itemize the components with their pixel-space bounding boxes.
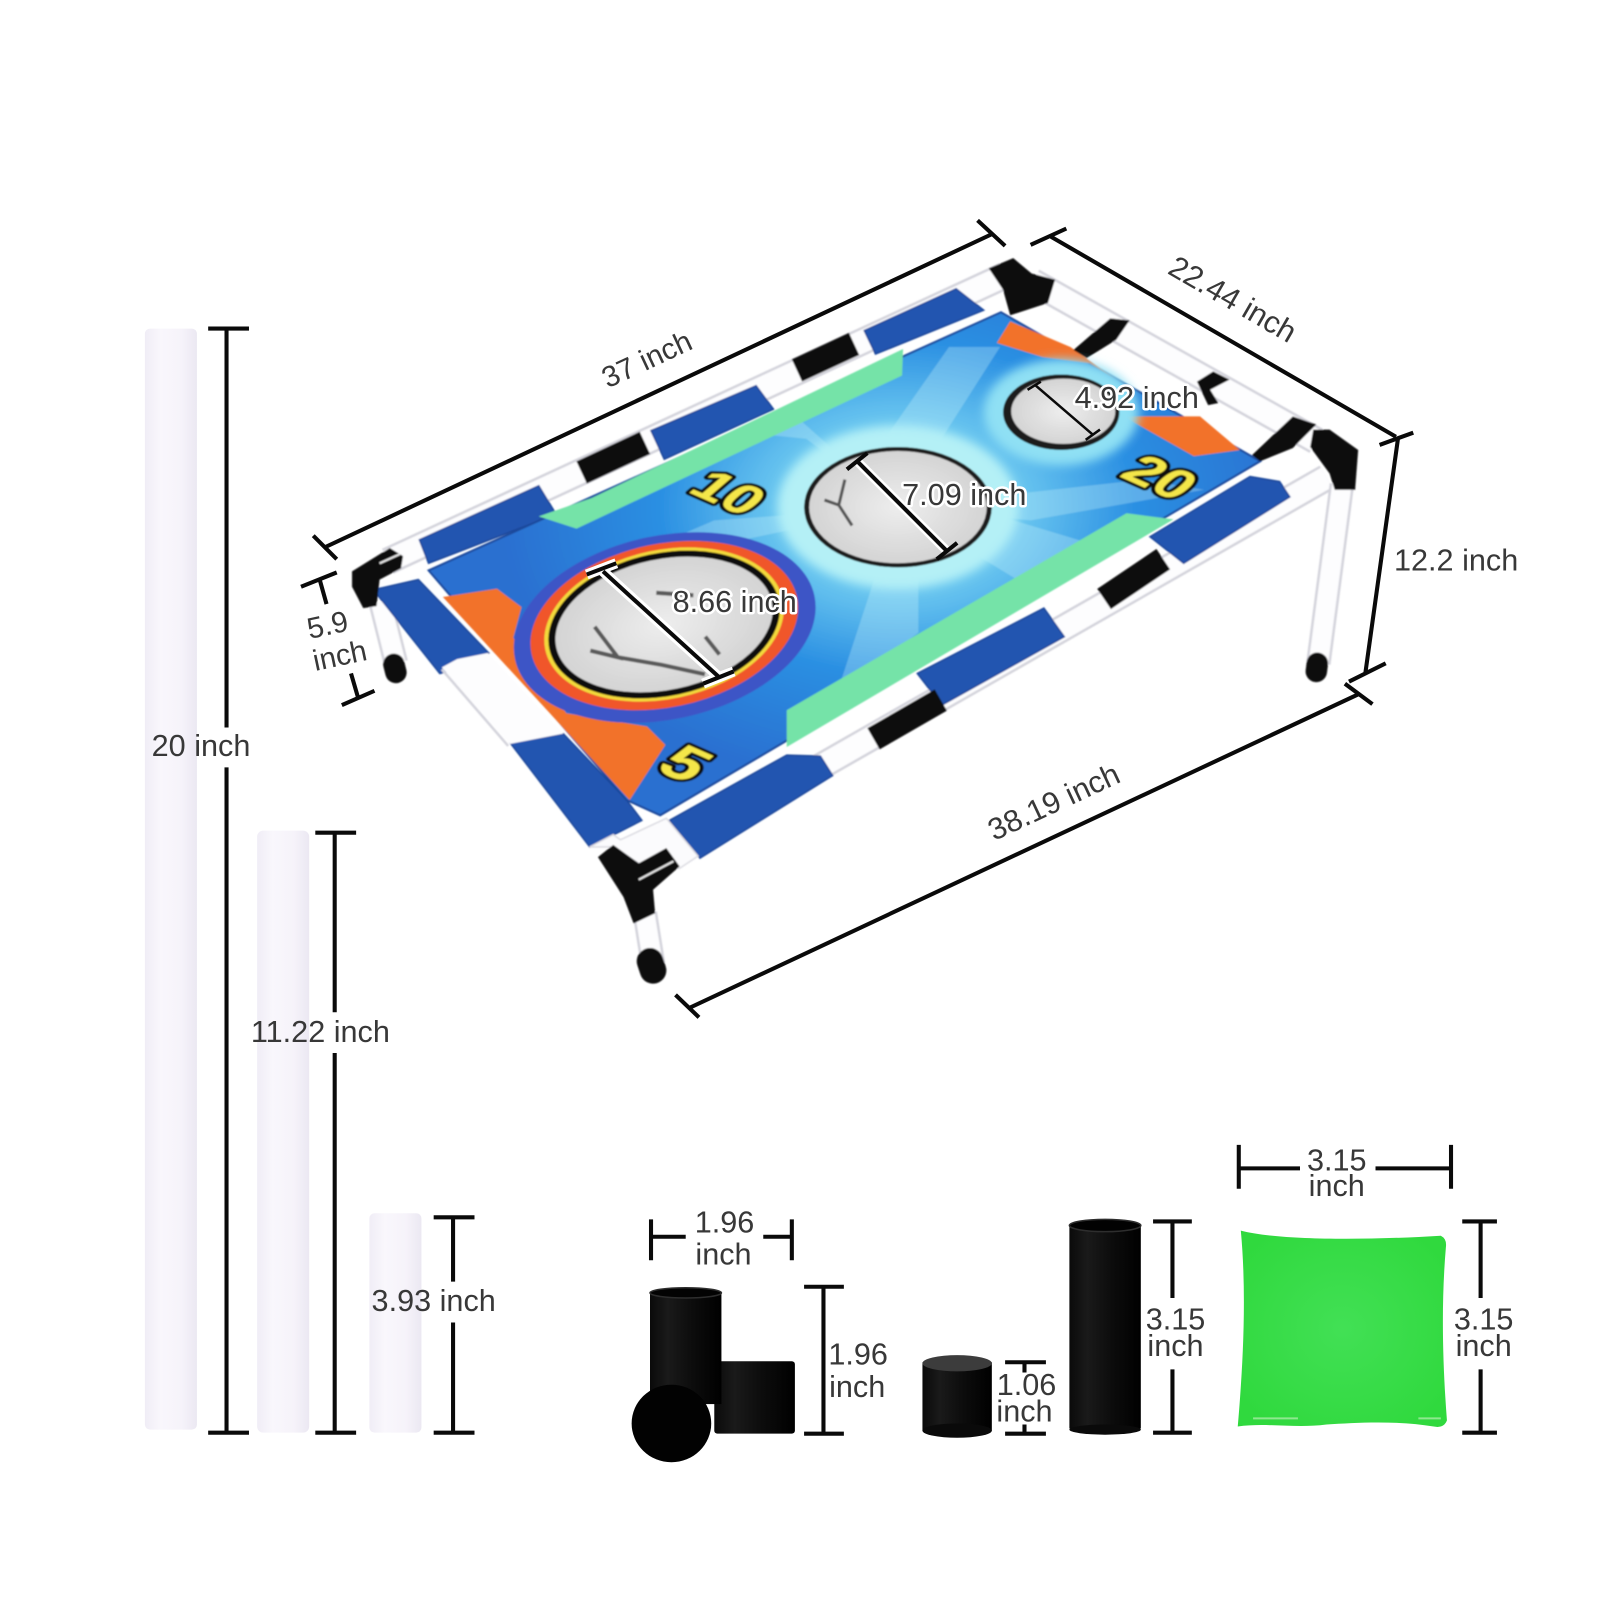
black short cylinder: [922, 1355, 992, 1438]
mat surface: [429, 312, 1260, 815]
green bean bag: [1238, 1231, 1447, 1427]
score number 20: 20: [1109, 447, 1210, 509]
dimension: hole 4.92 inch: [1028, 381, 1199, 440]
dimension: hole 7.09 inch: 7.09 inch: [902, 478, 1026, 512]
black elbow connector: [632, 1288, 795, 1462]
dimension: hole 8.66 inch: [587, 563, 797, 684]
black sleeves: [582, 344, 1163, 739]
dimension: bag height 3.15 inch: inch: [1456, 1329, 1512, 1363]
dimension: elbow height 1.96 inch: inch: [829, 1370, 885, 1404]
highlight lines on connectors: [380, 554, 673, 880]
dimension: hole 7.09 inch: [847, 453, 1026, 559]
dimension: 12.2 inch: [1349, 433, 1518, 682]
score number 10: 10: [678, 462, 779, 524]
black corner connectors: [352, 258, 1358, 923]
black straps: [1073, 318, 1316, 461]
dimension: 11.22 inch: [251, 833, 390, 1433]
dimension: 1.06 inch: inch: [996, 1394, 1053, 1428]
frame tubes: [388, 276, 1327, 862]
hole: 5 points large: [496, 506, 834, 749]
medium white pole 11.22 inch: [257, 831, 309, 1433]
blue fabric flaps: [373, 289, 1290, 858]
dimension: 38.19 inch: [676, 684, 1372, 1017]
hole: 10 points medium: [778, 426, 1018, 589]
dimension: 11.22 inch: 11.22 inch: [251, 1015, 390, 1049]
score number 5: 5: [644, 736, 726, 792]
dimension: 37 inch: 37 inch: [597, 325, 697, 395]
dimension: 5.9 inch height: 5.9: [304, 605, 351, 646]
dimension: 22.44 inch: [1031, 229, 1396, 437]
game frame with target mat: [352, 258, 1358, 970]
dimension: 38.19 inch: 38.19 inch: [983, 757, 1125, 847]
black tall cylinder: [1069, 1219, 1141, 1435]
dimension: 3.93 inch: [372, 1217, 496, 1433]
hole: 20 points small: [984, 359, 1139, 465]
dimension: tall cylinder 3.15 inch: [1146, 1221, 1205, 1433]
dimension: 1.06 inch: [996, 1362, 1056, 1434]
lower left tube: [442, 653, 698, 868]
dimension: bag width 3.15 inch: [1239, 1143, 1451, 1203]
dimension: 37 inch: [313, 220, 1005, 559]
dimension: 5.9 inch height: inch: [310, 634, 370, 678]
green strips: [539, 349, 1173, 747]
dimension: bag width 3.15 inch: inch: [1309, 1169, 1365, 1203]
dimension: 1.06 inch: 1.06: [997, 1368, 1056, 1402]
dimension: elbow height 1.96 inch: [804, 1287, 888, 1434]
dimension: 5.9 inch height: [301, 572, 374, 705]
dimension: 20 inch: [152, 329, 250, 1433]
dimension: hole 4.92 inch: 4.92 inch: [1075, 381, 1199, 415]
dimension: tall cylinder 3.15 inch: 3.15: [1146, 1303, 1205, 1337]
mat light rays: [687, 346, 1204, 678]
dimension: tall cylinder 3.15 inch: inch: [1147, 1329, 1204, 1363]
dimension: bag height 3.15 inch: [1454, 1221, 1513, 1433]
dimension: 20 inch: 20 inch: [152, 729, 250, 763]
dimension: 12.2 inch: 12.2 inch: [1394, 543, 1518, 577]
black feet: [394, 663, 1317, 970]
dimension: bag height 3.15 inch: 3.15: [1454, 1303, 1513, 1337]
dimension: hole 8.66 inch: 8.66 inch: [673, 585, 797, 619]
frame legs: [381, 485, 1342, 964]
dimension: elbow width 1.96 inch: [651, 1206, 792, 1271]
dimension: elbow width 1.96 inch: 1.96: [695, 1206, 754, 1240]
orange corners: [443, 321, 1240, 800]
dimension: bag width 3.15 inch: 3.15: [1307, 1143, 1367, 1177]
short white pole 3.93 inch: [369, 1213, 421, 1433]
dimension: 3.93 inch: 3.93 inch: [372, 1284, 496, 1318]
long white pole 20 inch: [145, 329, 197, 1430]
dimension: elbow width 1.96 inch: inch: [695, 1237, 752, 1271]
dimension: elbow height 1.96 inch: 1.96: [828, 1337, 888, 1371]
dimension: 22.44 inch: 22.44 inch: [1163, 249, 1302, 350]
